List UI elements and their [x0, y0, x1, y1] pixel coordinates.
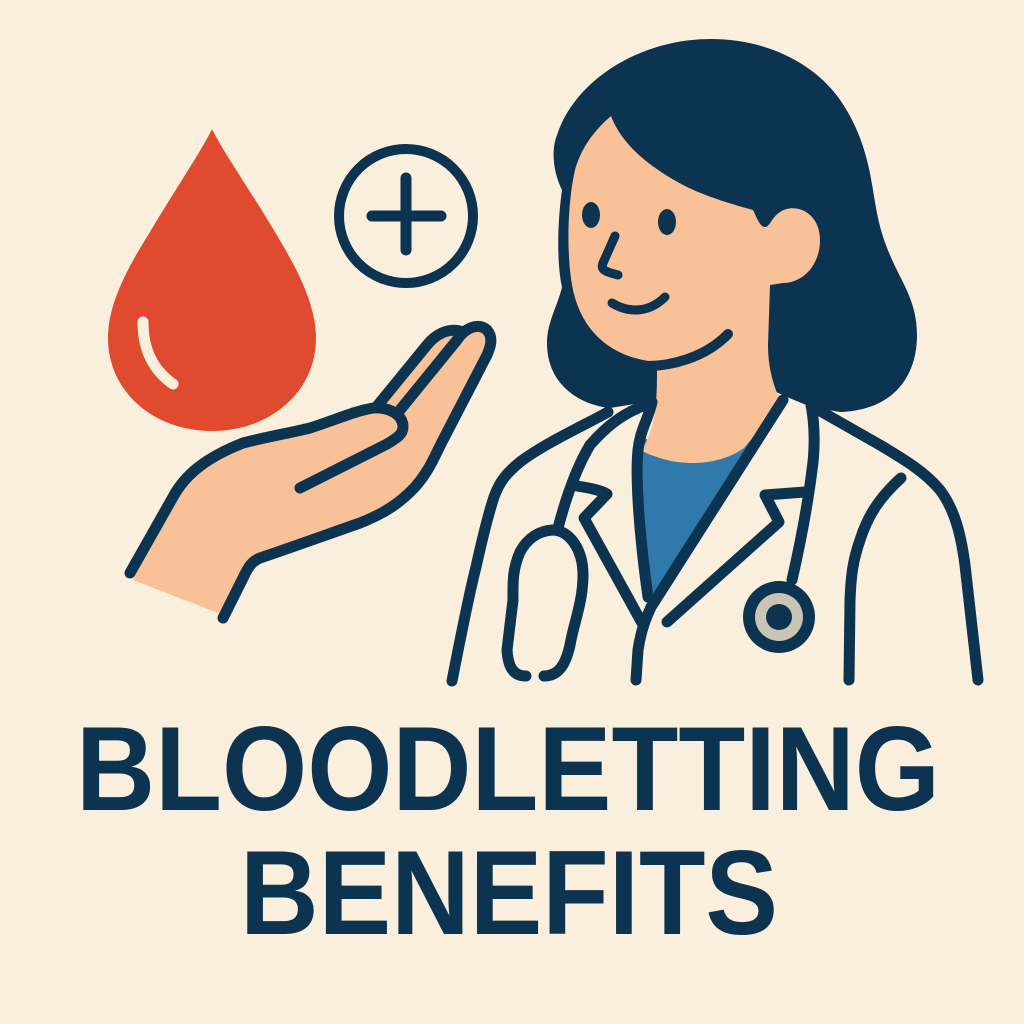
icon: blood drop: [108, 129, 316, 431]
stethoscope: [507, 405, 815, 676]
face and neck: [568, 116, 820, 463]
title: [76, 702, 940, 960]
title: BLOODLETTING: [76, 702, 940, 836]
facial features: [582, 202, 728, 366]
icon: plus in circle: [339, 149, 473, 283]
shirt: [636, 430, 760, 602]
doctor illustration: [452, 39, 978, 681]
hair: [547, 39, 917, 412]
title: BENEFITS: [240, 826, 778, 960]
icon: open hand: [130, 324, 491, 618]
coat lines: [452, 400, 978, 681]
